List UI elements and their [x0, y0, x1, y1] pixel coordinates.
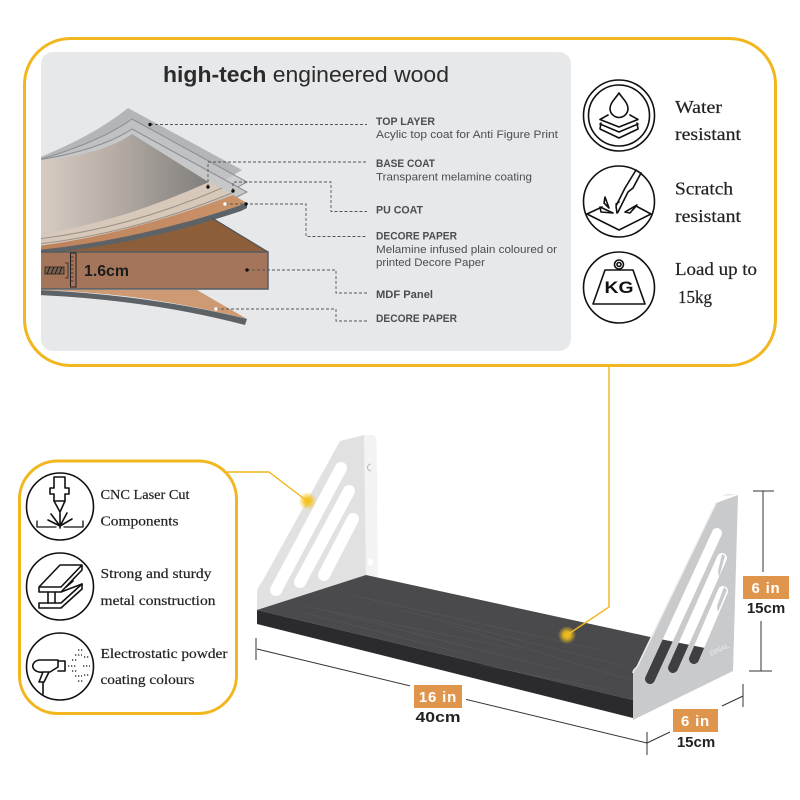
shelf product	[257, 435, 738, 720]
thickness value: 1.6cm	[84, 263, 129, 280]
brand mark: DINAL	[709, 643, 731, 658]
dimension: height: 6 in	[751, 580, 781, 597]
icon: thickness ruler	[45, 253, 76, 287]
label: base coat	[376, 158, 532, 184]
dimension: height	[743, 491, 789, 671]
hotspot: shelf	[558, 626, 576, 644]
icon: scratch resistant	[584, 166, 654, 237]
label: decore paper	[376, 230, 557, 269]
dimension: length	[256, 638, 647, 755]
connector: bracket callout	[227, 472, 307, 501]
dimension: depth: 15cm	[677, 734, 715, 751]
text: CNC laser cut: CNC Laser Cut	[100, 488, 190, 503]
text: electrostatic powder	[100, 647, 228, 688]
dimension: length: 16 in	[419, 689, 457, 706]
dimension: depth	[647, 684, 743, 751]
icon: load weight: KG	[604, 278, 634, 297]
text: water resistant	[675, 97, 741, 144]
text: load up to 15kg	[675, 259, 757, 307]
text: strong and sturdy	[100, 567, 216, 609]
leader lines	[148, 123, 367, 321]
icon: CNC laser	[26, 473, 94, 540]
label: top layer: Acylic top coat for Anti Figure Print	[376, 129, 558, 141]
panel: layer diagram background	[41, 52, 571, 351]
shelf front face	[257, 610, 633, 718]
text: electrostatic powder: coating colours	[100, 673, 194, 688]
dimension: height: 15cm	[747, 600, 785, 617]
wood grain	[300, 595, 630, 690]
text: electrostatic powder: Electrostatic powder	[100, 647, 228, 662]
label: bottom decore paper: DECORE PAPER	[376, 313, 457, 325]
icon: water resistant	[584, 80, 654, 151]
panel: metal features	[20, 461, 236, 714]
label: base coat: BASE COAT	[376, 158, 435, 170]
third layer sheet	[41, 128, 248, 210]
icon: powder spray gun	[26, 633, 94, 700]
text: scratch resistant: Scratch	[675, 178, 733, 198]
layered wood diagram	[38, 108, 268, 325]
label: top layer	[376, 116, 558, 141]
MDF front face	[38, 218, 268, 289]
text: scratch resistant	[675, 178, 741, 226]
dimension: depth: 6 in	[681, 713, 710, 730]
brushed base coat sheet	[38, 134, 210, 234]
connector: panel to shelf	[567, 366, 609, 635]
label: decore paper: DECORE PAPER	[376, 230, 457, 242]
top layer sheet	[38, 108, 242, 250]
text: strong and sturdy: metal construction	[100, 594, 216, 609]
text: water resistant: Water	[675, 97, 722, 117]
decor paper sheet	[38, 195, 247, 250]
left metal bracket	[257, 435, 378, 612]
MDF top face	[38, 218, 268, 252]
text: CNC laser cut: Components	[100, 514, 178, 530]
label: base coat: Transparent melamine coating	[376, 172, 532, 184]
label: top layer: TOP LAYER	[376, 116, 435, 128]
text: scratch resistant: resistant	[675, 206, 741, 226]
shelf top board	[257, 575, 655, 700]
transparent tan layers	[38, 182, 232, 246]
label: MDF panel: MDF Panel	[376, 289, 433, 301]
icon: steel beam	[26, 553, 94, 620]
label: decore paper: Melamine infused plain coloured or	[376, 244, 557, 256]
hotspot: bracket	[298, 492, 316, 510]
bottom decor sheet	[38, 290, 247, 319]
heading: high-tech engineered wood	[163, 62, 449, 87]
icon: load weight	[584, 252, 654, 323]
text: strong and sturdy: Strong and sturdy	[100, 567, 212, 582]
right metal bracket	[633, 494, 738, 720]
label: decore paper: printed Decore Paper	[376, 257, 485, 269]
panel: high-tech engineered wood	[24, 38, 776, 366]
sheet edge	[38, 203, 247, 254]
text: water resistant: resistant	[675, 124, 741, 144]
dimension: length: 40cm	[416, 709, 460, 726]
label: PU coat: PU COAT	[376, 204, 423, 216]
text: load up to 15kg: Load up to	[675, 259, 757, 279]
text: load up to 15kg: 15kg	[678, 287, 712, 307]
second layer sheet	[41, 118, 248, 187]
text: CNC laser cut	[100, 488, 190, 530]
